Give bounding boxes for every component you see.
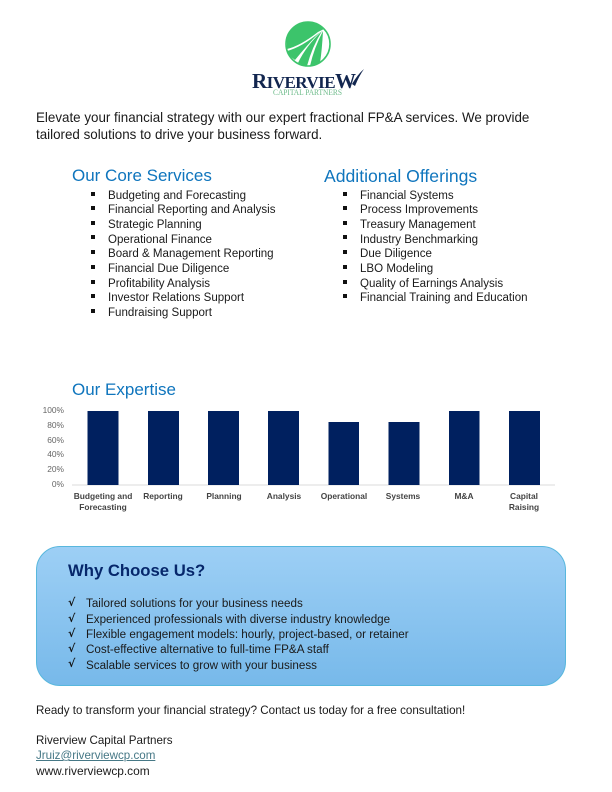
category labels: Operational <box>321 491 367 501</box>
list: core services: Strategic Planning <box>108 219 202 231</box>
list: core services: Financial Due Diligence <box>108 263 229 275</box>
list: core services: Operational Finance <box>108 234 212 246</box>
list: core services: Investor Relations Support <box>108 292 244 304</box>
list: additional offerings: Due Diligence <box>360 248 432 260</box>
heading: our expertise: Our Expertise <box>72 380 176 399</box>
list: core services: Fundraising Support <box>108 307 212 319</box>
list: core services: Budgeting and Forecasting <box>108 190 246 202</box>
category labels: M&A <box>454 491 474 501</box>
contact details <box>36 734 173 778</box>
checklist: √ <box>68 642 75 655</box>
list: additional offerings: LBO Modeling <box>360 263 433 275</box>
category labels: Raising <box>509 502 539 512</box>
icon: river circle <box>286 22 330 66</box>
wordmark swoosh <box>352 69 364 86</box>
list: additional offerings: Process Improvements <box>360 204 478 216</box>
category labels: Forecasting <box>79 502 127 512</box>
intro text: tailored solutions to drive your business forward. <box>36 127 322 142</box>
list: core services <box>91 190 276 319</box>
category labels <box>74 491 539 512</box>
list: additional offerings: Industry Benchmarking <box>360 234 478 246</box>
list: core services: Profitability Analysis <box>108 278 210 290</box>
checklist: √ <box>68 627 75 640</box>
list: additional offerings <box>343 190 528 304</box>
list: additional offerings: Quality of Earnings Analysis <box>360 278 503 290</box>
call to action: Ready to transform your financial strategy? Contact us today for a free consultation! <box>36 704 465 717</box>
list: additional offerings: Treasury Management <box>360 219 476 231</box>
contact details: Riverview Capital Partners <box>36 734 173 747</box>
intro text <box>36 110 529 142</box>
logo <box>252 21 364 97</box>
checklist: √ <box>68 596 75 609</box>
category labels: Budgeting and <box>74 491 132 501</box>
category labels: Systems <box>386 491 421 501</box>
list: additional offerings: Financial Systems <box>360 190 454 202</box>
y axis labels: 20% <box>47 464 65 474</box>
category labels: Planning <box>206 491 242 501</box>
checklist: √ <box>68 657 75 670</box>
checklist <box>68 596 409 672</box>
category labels: Capital <box>510 491 538 501</box>
bar chart <box>43 405 555 512</box>
list: core services: Board & Management Reporting <box>108 248 274 260</box>
y axis labels <box>43 405 65 489</box>
intro text: Elevate your financial strategy with our expert fractional FP&A services. We provide <box>36 110 529 125</box>
category labels: Reporting <box>143 491 183 501</box>
contact details: Jruiz@riverviewcp.com <box>36 749 155 762</box>
y axis labels: 80% <box>47 420 65 430</box>
checklist: Scalable services to grow with your business <box>86 659 317 672</box>
tagline: CAPITAL PARTNERS <box>273 88 342 97</box>
y axis labels: 100% <box>43 405 65 415</box>
checklist: √ <box>68 612 75 625</box>
heading: core services: Our Core Services <box>72 166 212 185</box>
list: core services: Financial Reporting and Analysis <box>108 204 276 216</box>
contact details: www.riverviewcp.com <box>36 764 150 778</box>
category labels: Analysis <box>267 491 302 501</box>
list: additional offerings: Financial Training and Education <box>360 292 528 304</box>
y axis labels: 40% <box>47 449 65 459</box>
checklist: Experienced professionals with diverse industry knowledge <box>86 613 390 626</box>
checklist: Tailored solutions for your business needs <box>86 597 303 610</box>
heading: additional offerings: Additional Offerings <box>324 166 477 186</box>
checklist: Flexible engagement models: hourly, project-based, or retainer <box>86 628 409 641</box>
y axis labels: 60% <box>47 435 65 445</box>
wordmark: RIVERVIEW <box>252 69 356 93</box>
heading: why choose us: Why Choose Us? <box>68 561 205 580</box>
panel: why choose us <box>36 546 566 686</box>
bars <box>88 411 540 485</box>
y axis labels: 0% <box>52 479 65 489</box>
checklist: Cost-effective alternative to full-time FP&A staff <box>86 643 329 656</box>
